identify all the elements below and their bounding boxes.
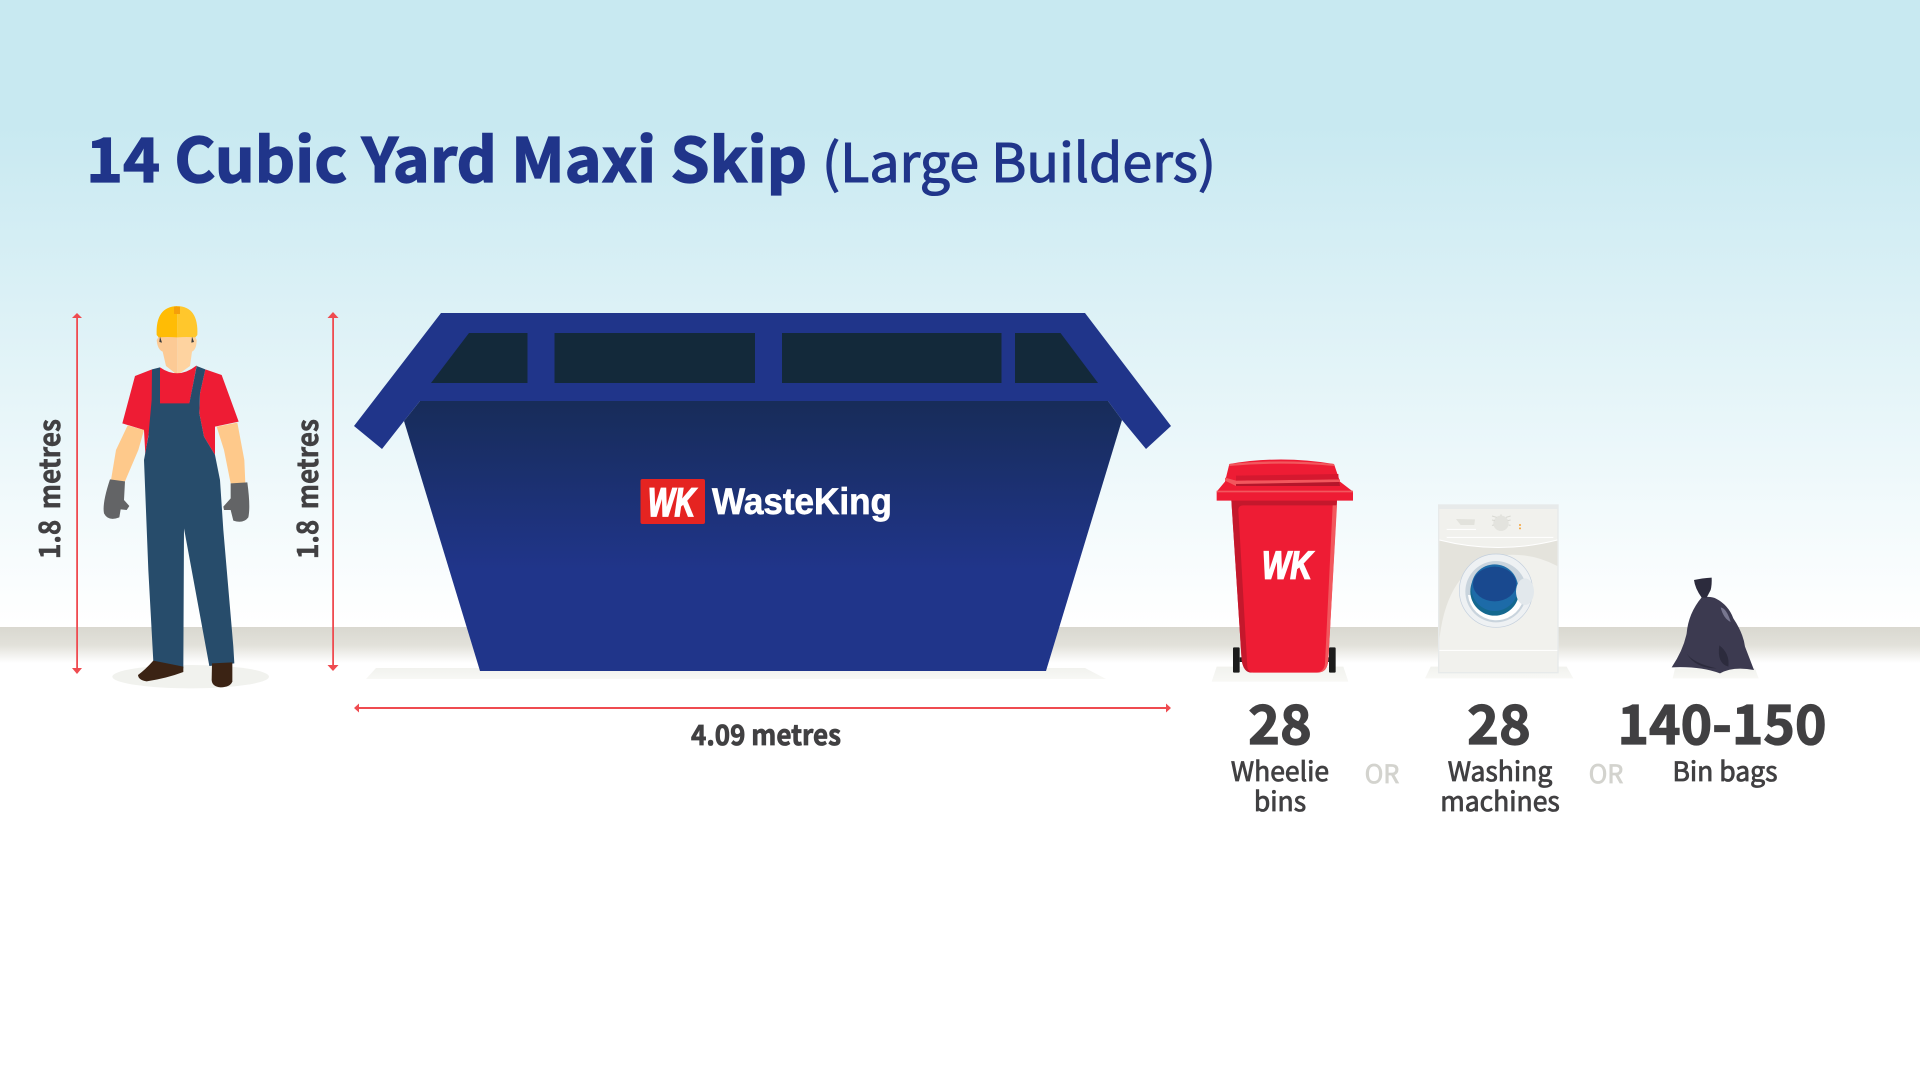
bin bag [1672,578,1759,678]
bin shadow [1212,667,1348,682]
worker gloves [104,479,249,522]
washing machine [1425,505,1573,678]
separator: or: OR [1589,755,1623,791]
skip [354,313,1171,679]
height label: skip: 1.8 metres [285,419,327,559]
stat: wheelie bins [1231,681,1329,819]
worker head [157,333,197,375]
washer shaded panel [1439,540,1557,640]
worker boots [138,661,232,687]
skip body [404,401,1122,671]
WasteKing logo: WK [648,481,697,525]
washer shadow [1425,667,1573,678]
bin lid [1217,459,1353,501]
skip windows [431,333,1098,383]
title [86,111,1216,200]
skip ground shadow [366,668,1106,679]
washer top strip [1439,505,1558,509]
worker shadow [112,665,269,688]
bin body [1231,500,1337,673]
stat: wheelie bins: Wheelie [1231,750,1329,789]
width arrow [354,704,1171,712]
bag folds [1687,645,1729,668]
stat: bin bags: 140-150 [1618,681,1826,760]
worker shirt [122,365,239,455]
worker arms [111,423,245,483]
wheelie bin [1212,459,1353,682]
background: sky gradient [0,0,1920,627]
bag sack [1672,597,1754,673]
stat: bin bags: Bin bags [1672,750,1778,789]
bag highlight [1721,607,1731,622]
background: ground band [0,627,1920,663]
title: (Large Builders) [822,122,1216,198]
height arrow: skip [328,312,338,671]
height label: person: 1.8 metres [27,419,69,559]
stat: washing machines: machines [1440,780,1560,819]
WasteKing logo: WasteKing [712,481,892,522]
separator: or: OR [1365,755,1399,791]
worker hard hat [157,306,197,343]
WasteKing logo [640,479,892,525]
bin wheels [1233,647,1336,673]
width label: 4.09 metres [691,714,841,754]
stat: wheelie bins: 28 [1248,681,1312,760]
bag shadow [1673,668,1759,678]
stat: washing machines: 28 [1467,681,1531,760]
stat: washing machines: Washing [1448,750,1552,789]
washer controls [1439,514,1557,650]
skip rim [354,313,1171,449]
worker figure [104,306,269,688]
title: 14 Cubic Yard Maxi Skip [86,111,807,200]
stat: wheelie bins: bins [1254,780,1306,819]
bin WK logo: WK [1262,543,1314,587]
bag neck [1694,578,1712,598]
worker overalls [144,366,234,668]
washer door [1459,554,1534,627]
washer cabinet [1439,505,1558,673]
stat: washing machines [1440,681,1560,819]
height arrow: person [72,313,82,674]
